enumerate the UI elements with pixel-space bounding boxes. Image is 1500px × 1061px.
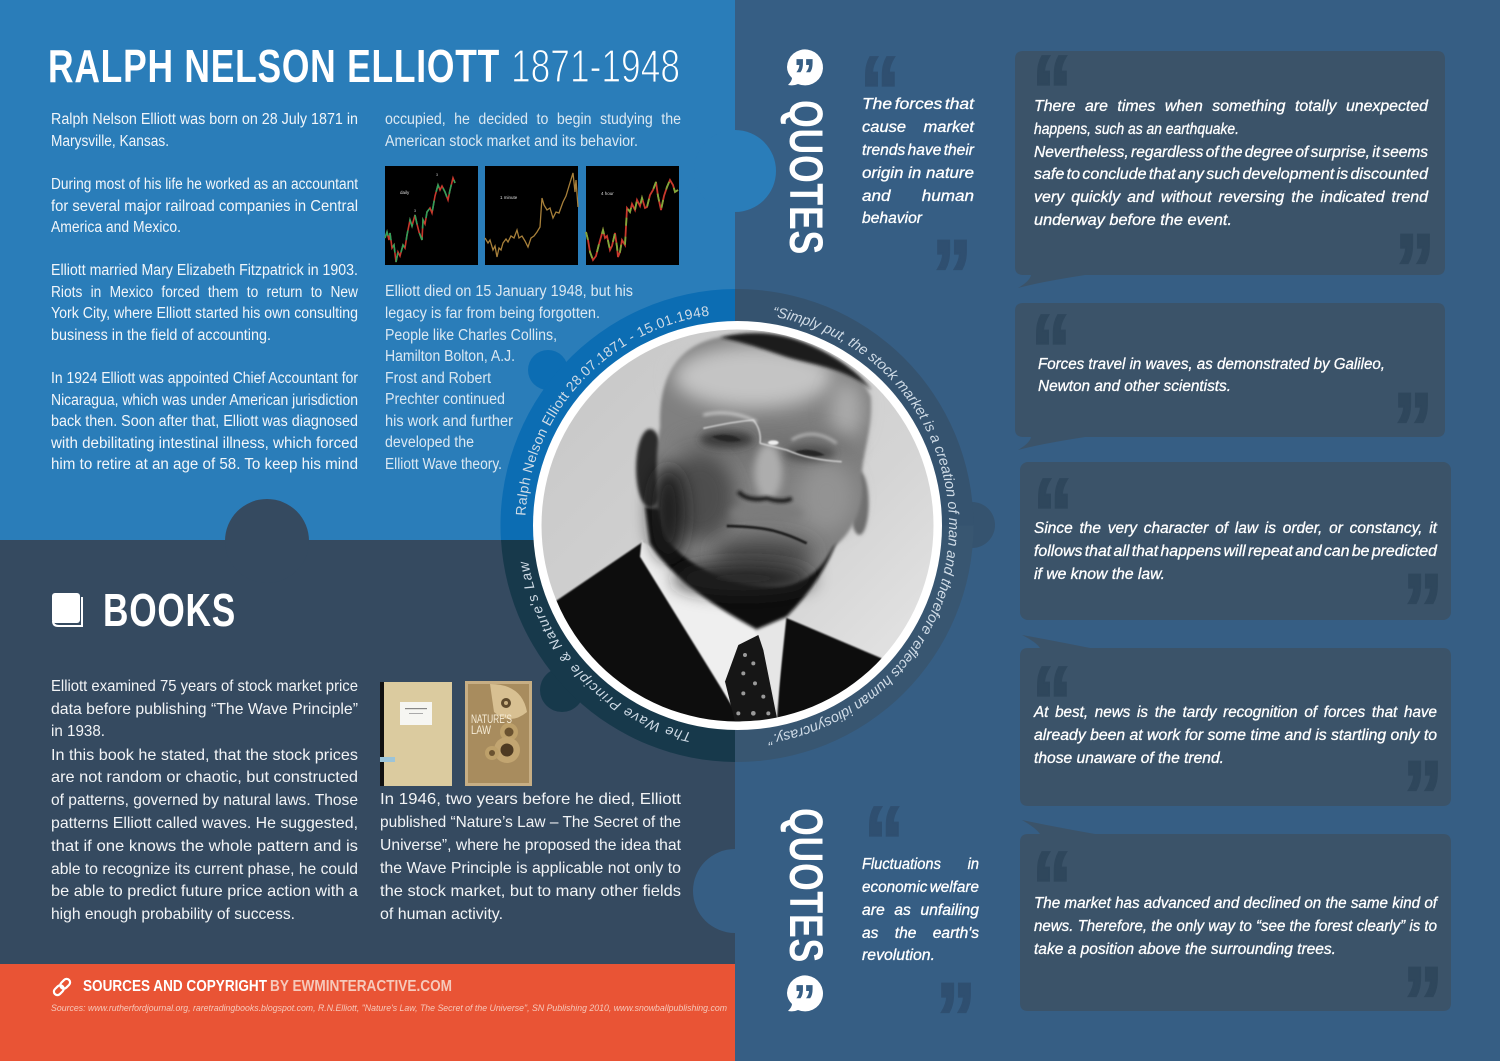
footer: sources and copyright: Sources: www.rutherfordjournal.org, raretradingbooks.blogspot.com, R.N.Elliott, "Nature's Law, The Secret of the Universe", SN Publishing 2010, www.snowballpublishing.com — [51, 1003, 727, 1014]
footer: sources and copyright: BY EWMINTERACTIVE.COM — [270, 978, 452, 995]
face shading — [652, 345, 863, 593]
heading: top quotes: QUOTES — [780, 100, 833, 255]
chart: 4 hour — [586, 166, 679, 265]
text block: biography right column legacy: Prechter continued — [385, 391, 505, 408]
chart: 1 minute — [485, 166, 578, 265]
quote: fluctuations in economic welfare: revolution. — [862, 947, 935, 964]
text block: books right column: published “Nature’s Law – The Secret of the — [380, 814, 681, 831]
text block: books left column: patterns Elliott called waves. He suggested, — [51, 815, 358, 832]
portrait medallion ring — [500, 289, 995, 762]
puzzle tab: quotes into books — [693, 849, 735, 933]
quote: forces that cause market trends: The forces that — [862, 96, 975, 113]
chart: daily: daily — [400, 190, 410, 195]
quote bubble 1: unexpected events: There are times when something totally unexpected — [1034, 98, 1429, 115]
quote bubble 3: character of law — [1020, 458, 1451, 666]
text block: books right column: Universe”, where he proposed the idea that — [380, 837, 682, 854]
text block: books left column: high enough probability of success. — [51, 906, 295, 923]
shirt collar — [640, 540, 787, 710]
quote: fluctuations in economic welfare — [862, 786, 979, 1061]
puzzle tab: books into biography — [225, 499, 309, 583]
quote: fluctuations in economic welfare: economic welfare — [862, 879, 979, 896]
quote: forces that cause market trends: “ — [860, 36, 900, 148]
quote bubble 1: unexpected events: safe to conclude that any such development is discounted — [1034, 166, 1429, 183]
text block: biography left column: back then. Soon after that, Elliott was diagnosed — [51, 413, 358, 430]
text block: books right column: the stock market, but to many other fields — [380, 883, 681, 900]
quote bubble 5: forest and trees — [1020, 820, 1451, 1059]
puzzle tab: biography into quotes — [694, 130, 776, 212]
icon: speech bubble — [787, 975, 823, 1027]
text block: books right column: In 1946, two years before he died, Elliott — [380, 791, 682, 808]
text block: biography left column: with debilitating intestinal illness, which forced — [50, 435, 358, 452]
text block: biography right column legacy: Hamilton Bolton, A.J. — [385, 348, 515, 365]
text block: books left column — [51, 678, 358, 923]
image: Nature's Law book cover: NATURE'S — [471, 714, 512, 726]
quote bubble 4: news and forces: “ — [1032, 646, 1072, 758]
quote bubble 5: forest and trees: take a position above the surrounding trees. — [1034, 941, 1336, 958]
quote bubble 5: forest and trees: The market has advanced and declined on the same kind of — [1034, 895, 1439, 912]
image: Nature's Law book cover: LAW — [471, 725, 491, 737]
quote bubble 2: forces travel in waves: Newton and other scientists. — [1038, 378, 1231, 395]
hair — [720, 333, 872, 390]
quote: fluctuations in economic welfare: as the earth's — [862, 925, 979, 942]
chart: daily — [385, 166, 478, 265]
quote bubble 1: unexpected events: ” — [1395, 214, 1435, 326]
text block: biography left column: Elliott married Mary Elizabeth Fitzpatrick in 1903. — [51, 262, 358, 279]
head — [657, 336, 871, 587]
text block: biography right column legacy: Frost and Robert — [385, 370, 492, 387]
suit — [556, 541, 882, 722]
eyes — [712, 435, 825, 456]
heading: books — [52, 584, 236, 636]
quote bubble 2: forces travel in waves: ” — [1393, 373, 1433, 485]
text block: biography right column legacy: developed the — [385, 434, 474, 451]
ring: bottom-left quadrant — [501, 540, 735, 762]
icon: book — [52, 593, 83, 627]
quote bubble 5: forest and trees: ” — [1403, 947, 1443, 1059]
ring: curved text book titles: The Wave Principle & Nature's Law — [520, 562, 690, 742]
quote bubble 5: forest and trees: news. Therefore, the only way to “see the forest clearly” is to — [1034, 918, 1437, 935]
text block: books left column: data before publishing “The Wave Principle” — [51, 701, 358, 718]
chart: 4 hour: 4 hour — [601, 191, 614, 196]
text block: books left column: In this book he stated, that the stock prices — [51, 747, 358, 764]
text block: biography left column — [50, 111, 359, 473]
text block: biography right column top — [385, 111, 681, 150]
text block: biography right column legacy: legacy is far from being forgotten. — [385, 305, 600, 322]
text block: biography left column: for several major railroad companies in Central — [51, 198, 358, 215]
text block: biography right column top: occupied, he decided to begin studying the — [385, 111, 681, 128]
text block: biography left column: Marysville, Kansas. — [51, 133, 169, 150]
chart: 1 minute: 1 minute — [500, 195, 518, 200]
quote bubble 4: news and forces: already been at work for some time and is startling only to — [1034, 727, 1437, 744]
text block: books left column: that if one knows the whole pattern and is — [51, 838, 358, 855]
icon: speech bubble — [787, 49, 823, 101]
text block: biography right column legacy: Elliott died on 15 January 1948, but his — [385, 283, 633, 300]
quote bubble 4: news and forces: At best, news is the tardy recognition of forces that have — [1033, 704, 1437, 721]
title: 1871-1948 — [511, 40, 680, 92]
quote bubble 3: character of law: “ — [1033, 458, 1073, 570]
nose shadow — [738, 492, 792, 501]
quote: fluctuations in economic welfare: “ — [864, 786, 904, 898]
portrait photograph — [530, 320, 950, 740]
text block: books left column: be able to predict future price action with a — [51, 883, 358, 900]
text block: books left column: Elliott examined 75 years of stock market price — [51, 678, 358, 695]
heading: books: BOOKS — [103, 584, 236, 636]
quote bubble 2: forces travel in waves: “ — [1031, 294, 1071, 406]
chart: daily: 3 — [414, 209, 416, 213]
quote bubble 4: news and forces — [1020, 635, 1451, 853]
ring: top-left quadrant — [500, 289, 735, 541]
pince-nez glasses — [703, 420, 842, 462]
neck shadow — [645, 507, 838, 629]
text block: books right column — [380, 791, 682, 923]
quote bubble 2: forces travel in waves: Forces travel in waves, as demonstrated by Galileo, — [1038, 356, 1385, 373]
text block: books left column: are not random or chaotic, but constructed — [51, 769, 358, 786]
quote: forces that cause market trends: behavior — [862, 210, 923, 227]
text block: biography left column: In 1924 Elliott was appointed Chief Accountant for — [51, 370, 358, 387]
text block: biography left column: Ralph Nelson Elliott was born on 28 July 1871 in — [51, 111, 358, 128]
ring: right quadrants — [735, 289, 995, 762]
mouth — [727, 526, 807, 543]
panel: books background — [0, 540, 735, 964]
heading: top quotes — [780, 49, 833, 255]
panel: biography background — [0, 0, 735, 541]
quote bubble 1: unexpected events: “ — [1032, 35, 1072, 147]
quote bubble 1: unexpected events: very quickly and without reversing the indicated trend — [1034, 189, 1429, 206]
icon: speech bubble: ” — [793, 49, 816, 101]
quote bubble 2: forces travel in waves — [1015, 294, 1445, 485]
quote bubble 3: character of law: if we know the law. — [1034, 566, 1165, 583]
text block: biography left column: Nicaragua, which was under American jurisdiction — [51, 392, 358, 409]
quote bubble 3: character of law: follows that all that happens will repeat and can be predicted — [1034, 543, 1438, 560]
quote bubble 3: character of law: ” — [1403, 554, 1443, 666]
text block: books right column: of human activity. — [380, 906, 503, 923]
icon: speech bubble: ” — [793, 975, 816, 1027]
eyebrows — [703, 413, 837, 443]
quote: forces that cause market trends: and human — [862, 188, 974, 205]
quote bubble 1: unexpected events: underway before the event. — [1034, 212, 1232, 229]
quote: forces that cause market trends: trends have their — [862, 142, 975, 159]
text block: biography left column: During most of his life he worked as an accountant — [51, 176, 359, 193]
text block: biography right column legacy: People like Charles Collins, — [385, 327, 557, 344]
quote bubble 3: character of law: Since the very character of law is order, or constancy, it — [1034, 520, 1438, 537]
quote: fluctuations in economic welfare: Fluctuations in — [862, 856, 979, 873]
ring: curved text biography dates: Ralph Nelson Elliott 28.07.1871 - 15.01.1948 — [516, 306, 709, 515]
tie — [725, 635, 777, 722]
footer: sources and copyright — [51, 977, 727, 1014]
panel: quotes background — [735, 0, 1500, 1061]
footer: sources and copyright: SOURCES AND COPYRIGHT — [83, 978, 267, 995]
text block: biography right column legacy: Elliott Wave theory. — [385, 456, 502, 473]
image: Nature's Law book cover — [465, 681, 532, 786]
eye sockets — [700, 431, 835, 461]
icon: chain link — [52, 977, 72, 997]
text block: books left column: in 1938. — [51, 723, 105, 740]
text block: biography left column: him to retire at an age of 58. To keep his mind — [51, 456, 358, 473]
text block: biography left column: business in the field of accounting. — [51, 327, 271, 344]
text block: biography left column: York City, where Elliott started his own consulting — [51, 305, 358, 322]
chart: daily: 3 — [436, 173, 438, 177]
title: RALPH NELSON ELLIOTT — [48, 40, 500, 92]
text block: books right column: the Wave Principle is applicable not only to — [380, 860, 681, 877]
text block: biography right column legacy — [385, 283, 633, 473]
quote bubble 1: unexpected events: happens, such as an earthquake. — [1034, 121, 1239, 138]
text block: biography left column: America and Mexico. — [51, 219, 181, 236]
image: The Wave Principle book cover — [380, 682, 452, 786]
text block: biography left column: Riots in Mexico forced them to return to New — [51, 284, 359, 301]
quote: forces that cause market trends: ” — [932, 220, 972, 332]
text block: books left column: of patterns, governed by natural laws. Those — [51, 792, 358, 809]
quote bubble 5: forest and trees: “ — [1032, 831, 1072, 943]
ears — [636, 429, 869, 535]
quote: forces that cause market trends: cause market — [862, 119, 975, 136]
text block: biography right column legacy: his work and further — [385, 413, 513, 430]
quote bubble 1: unexpected events — [1015, 35, 1445, 326]
quote bubble 4: news and forces: ” — [1403, 741, 1443, 853]
quote: forces that cause market trends — [860, 36, 975, 332]
panel: sources footer — [0, 964, 735, 1061]
chart images: three wave price charts — [385, 166, 679, 265]
text block: books left column: able to recognize its current phase, he could — [51, 861, 358, 878]
quote: forces that cause market trends: origin in nature — [862, 165, 974, 182]
quote: fluctuations in economic welfare: are as unfailing — [862, 902, 979, 919]
text block: biography right column top: American stock market and its behavior. — [385, 133, 638, 150]
quote bubble 1: unexpected events: Nevertheless, regardless of the degree of surprise, it seems — [1034, 144, 1428, 161]
quote bubble 4: news and forces: those unaware of the trend. — [1034, 750, 1224, 767]
heading: bottom quotes: QUOTES — [780, 808, 833, 963]
ring: curved text quote: “Simply put, the stock market is a creation of man and therefore reflects human idiosyncrasy.” — [768, 307, 960, 746]
